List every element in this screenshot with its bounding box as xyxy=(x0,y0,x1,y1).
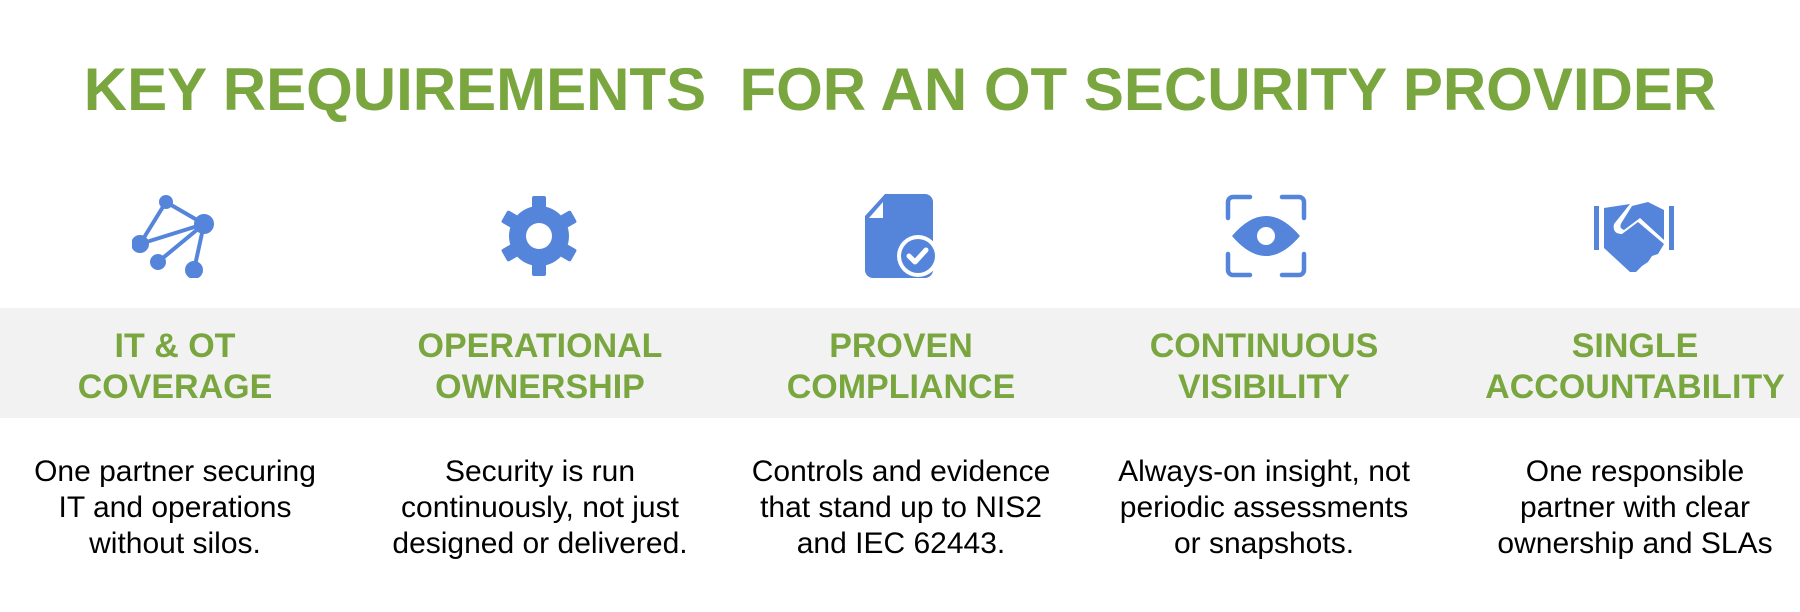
heading: single accountability: SINGLE xyxy=(1572,327,1698,365)
text: col2 description: designed or delivered. xyxy=(392,527,688,560)
icon: network xyxy=(132,195,214,278)
heading: operational ownership: OWNERSHIP xyxy=(435,368,645,406)
text: col5 description: partner with clear xyxy=(1520,491,1750,524)
heading: proven compliance: COMPLIANCE xyxy=(787,368,1015,406)
heading: proven compliance: PROVEN xyxy=(829,327,973,365)
text: col1 description: One partner securing xyxy=(34,455,316,488)
heading: IT & OT coverage: COVERAGE xyxy=(78,368,272,406)
heading: operational ownership: OPERATIONAL xyxy=(418,327,662,365)
column 4 xyxy=(1118,327,1410,560)
text: col4 description: or snapshots. xyxy=(1174,527,1354,560)
heading: continuous visibility: CONTINUOUS xyxy=(1150,327,1378,365)
heading: single accountability xyxy=(1485,327,1785,406)
heading: IT & OT coverage xyxy=(78,327,272,406)
text: col5 description: One responsible xyxy=(1526,455,1744,488)
heading: IT & OT coverage: IT & OT xyxy=(115,327,235,365)
title: KEY REQUIREMENTS FOR AN OT SECURITY PROVIDER xyxy=(84,56,1716,123)
column 1 xyxy=(34,327,316,560)
icon: eye scan xyxy=(1226,194,1306,278)
heading: continuous visibility: VISIBILITY xyxy=(1178,368,1350,406)
text: col2 description: continuously, not just xyxy=(401,491,679,524)
column 3 xyxy=(752,327,1050,560)
icon: gear xyxy=(502,196,576,276)
text: col1 description xyxy=(34,455,316,560)
text: col4 description: periodic assessments xyxy=(1120,491,1408,524)
grey heading band xyxy=(0,308,1800,418)
text: col3 description: that stand up to NIS2 xyxy=(760,491,1042,524)
heading: single accountability: ACCOUNTABILITY xyxy=(1485,368,1785,406)
column 2 xyxy=(392,327,688,560)
text: col3 description xyxy=(752,455,1050,560)
text: col1 description: IT and operations xyxy=(59,491,291,524)
heading: continuous visibility xyxy=(1150,327,1378,406)
heading: operational ownership xyxy=(418,327,662,406)
icon: handshake xyxy=(1594,202,1674,272)
heading: proven compliance xyxy=(787,327,1015,406)
text: col5 description: ownership and SLAs xyxy=(1497,527,1773,560)
text: col2 description: Security is run xyxy=(445,455,635,488)
column 5 xyxy=(1485,327,1785,560)
text: col3 description: Controls and evidence xyxy=(752,455,1050,488)
text: col4 description: Always-on insight, not xyxy=(1118,455,1410,488)
text: col1 description: without silos. xyxy=(89,527,261,560)
icon: document with check xyxy=(865,194,935,278)
text: col3 description: and IEC 62443. xyxy=(797,527,1005,560)
text: col2 description xyxy=(392,455,688,560)
text: col4 description xyxy=(1118,455,1410,560)
text: col5 description xyxy=(1497,455,1773,560)
